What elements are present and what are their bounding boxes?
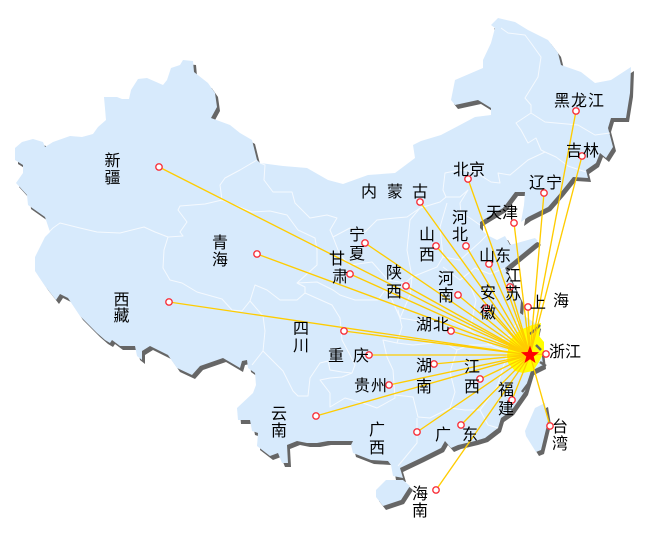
label: Zhejiang: 江: [565, 343, 581, 361]
label: Taiwan: 湾: [552, 435, 568, 453]
label: Hainan: 南: [412, 502, 428, 520]
label: Henan: 河: [438, 270, 454, 288]
label: Qinghai: 海: [212, 251, 228, 269]
label: Fujian: 福: [498, 381, 514, 399]
label: Shanxi: 山: [419, 226, 435, 244]
province markers: [156, 108, 585, 493]
label: Heilongjiang: 江: [588, 92, 604, 110]
label: Guangdong: 东: [462, 426, 478, 444]
label: Xinjiang: 新: [104, 152, 121, 170]
label: Sichuan: 川: [293, 338, 309, 355]
label: Jiangxi: 江: [464, 358, 480, 376]
label: Hunan: 南: [416, 378, 432, 396]
label: Ningxia: 夏: [349, 246, 365, 263]
label: Qinghai: 青: [212, 234, 228, 252]
label: Guizhou: 州: [371, 378, 387, 395]
label: Hubei: 湖: [416, 316, 432, 334]
label: Yunnan: 南: [271, 422, 287, 440]
label: Fujian: 建: [498, 400, 514, 418]
label: Liaoning: 辽: [529, 174, 545, 192]
label: Inner Mongolia: 古: [412, 183, 428, 201]
label: Inner Mongolia: 蒙: [387, 183, 403, 201]
label: Chongqing: 重: [328, 347, 344, 365]
label: Henan: 南: [438, 287, 454, 305]
label: Hebei: 河: [452, 209, 468, 227]
label: Anhui: 安: [480, 284, 496, 302]
label: Tibet: 藏: [113, 307, 130, 325]
label: Hebei: 北: [452, 226, 468, 244]
label: Hubei: 北: [433, 316, 449, 334]
route lines to Hangzhou: [159, 111, 582, 490]
label: Shandong: 山: [479, 247, 495, 265]
label: Beijing: 北: [453, 161, 469, 179]
label: Jiangsu: 苏: [505, 285, 521, 303]
label: Shandong: 东: [495, 247, 511, 265]
label: Gansu: 甘: [329, 250, 345, 268]
label: Shaanxi: 西: [386, 284, 402, 301]
label: Chongqing: 庆: [353, 347, 369, 365]
label: Taiwan: 台: [552, 418, 568, 436]
label: Jilin: 林: [583, 142, 599, 160]
label: Yunnan: 云: [271, 406, 287, 423]
provincial borders: [48, 28, 610, 466]
label: Shanxi: 西: [419, 247, 435, 264]
label: Guizhou: 贵: [354, 377, 370, 395]
label: Beijing: 京: [469, 161, 485, 179]
label: Tibet: 西: [113, 292, 130, 309]
label: Zhejiang: 浙: [549, 343, 565, 361]
label: Hunan: 湖: [416, 357, 432, 375]
highlighted Zhejiang burst: [507, 323, 544, 373]
label: Shanghai: 海: [553, 292, 569, 310]
label: Shaanxi: 陕: [386, 264, 402, 282]
label: Guangxi: 广: [369, 421, 385, 439]
label: Jiangxi: 西: [464, 379, 480, 396]
label: Inner Mongolia: 内: [361, 183, 377, 201]
icon: red star: [521, 346, 539, 363]
label: Guangxi: 西: [369, 440, 385, 457]
label: Hainan: 海: [412, 485, 428, 503]
label: Jilin: 吉: [566, 142, 582, 160]
label: Liaoning: 宁: [546, 174, 562, 192]
label: Tianjin: 津: [502, 204, 518, 222]
label: Ningxia: 宁: [349, 226, 365, 244]
label: Heilongjiang: 龙: [571, 92, 587, 110]
label: Xinjiang: 疆: [104, 170, 121, 187]
label: Sichuan: 四: [293, 321, 309, 338]
label: Heilongjiang: 黑: [554, 93, 570, 110]
label: Gansu: 肃: [332, 268, 348, 286]
label: Tianjin: 天: [486, 205, 502, 222]
coast shadow over highlight: [522, 325, 546, 392]
label: Anhui: 徽: [480, 304, 496, 322]
province labels: [104, 92, 604, 520]
label: Jiangsu: 江: [505, 267, 521, 285]
label: Shanghai: 上: [530, 294, 546, 312]
label: Guangdong: 广: [435, 426, 451, 444]
